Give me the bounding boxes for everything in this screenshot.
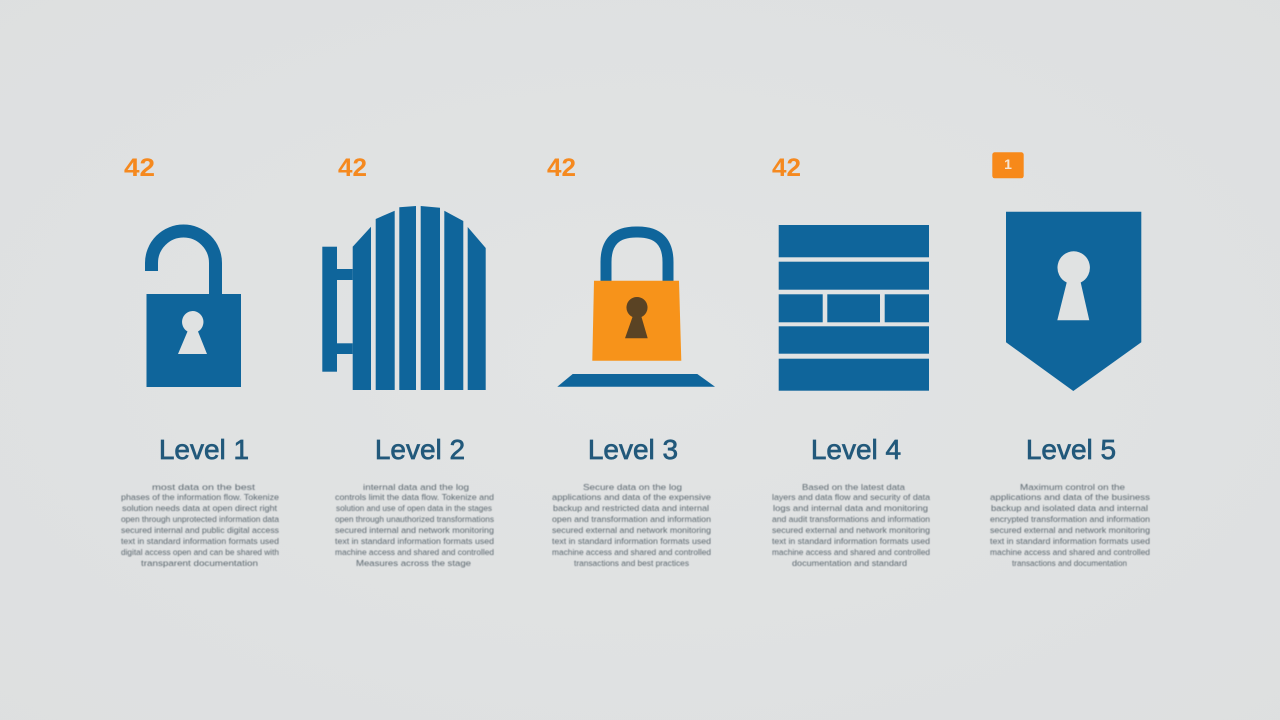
text block: level 1 description: most data on the best [152, 482, 256, 492]
text block: level 4 description: text in standard information formats used [772, 536, 930, 546]
text block: level 3 description: backup and restricted data and internal [553, 503, 709, 513]
number badge 1: 42 [124, 154, 155, 182]
icon: gate [322, 206, 486, 390]
text block: level 3 description: transactions and best practices [574, 558, 689, 568]
text block: level 4 description: documentation and standard [792, 558, 907, 568]
text block: level 3 description: open and transformation and information [552, 514, 711, 524]
number badge 2: 42 [338, 154, 367, 182]
text block: level 2 description: controls limit the data flow. Tokenize and [335, 492, 494, 502]
text block: level 1 description: secured internal and public digital access [121, 525, 279, 535]
text block: level 4 description: Based on the latest data [802, 482, 905, 492]
panel: level 3 [547, 154, 715, 568]
icon: shield with keyhole [1006, 212, 1141, 391]
text block: level 4 description: logs and internal data and monitoring [773, 503, 928, 513]
text block: level 5 description [990, 482, 1150, 568]
icon: open padlock [146, 231, 241, 387]
text block: level 5 description: transactions and documentation [1012, 558, 1127, 568]
text block: level 1 description: open through unprotected information data [121, 514, 279, 524]
text block: level 2 description: open through unauthorized transformations [335, 514, 494, 524]
text block: level 4 description: secured external and network monitoring [772, 525, 930, 535]
panel: level 4 [772, 154, 930, 568]
text block: level 2 description: secured internal and network monitoring [335, 525, 494, 535]
text block: level 3 description: applications and data of the expensive [552, 492, 711, 502]
text block: level 1 description: phases of the information flow. Tokenize [121, 492, 279, 502]
text block: level 1 description: transparent documentation [141, 558, 258, 568]
number badge 3: 42 [547, 154, 576, 182]
text block: level 3 description: text in standard information formats used [552, 536, 711, 546]
panel: level 2 [322, 154, 494, 568]
text block: level 1 description [121, 482, 279, 568]
text block: level 2 description [335, 482, 494, 568]
text block: level 3 description: Secure data on the log [583, 482, 682, 492]
text block: level 5 description: text in standard information formats used [990, 536, 1150, 546]
heading: level 5: Level 5 [1026, 434, 1116, 465]
heading: level 1: Level 1 [159, 434, 249, 465]
panel: level 5 [990, 152, 1150, 568]
text block: level 5 description: machine access and shared and controlled [990, 547, 1150, 557]
text block: level 2 description: machine access and shared and controlled [335, 547, 494, 557]
text block: level 5 description: encrypted transformation and information [990, 514, 1150, 524]
text block: level 5 description: Maximum control on the [1020, 482, 1125, 492]
text block: level 2 description: text in standard information formats used [335, 536, 494, 546]
text block: level 1 description: digital access open and can be shared with [121, 547, 279, 557]
text block: level 2 description: solution and use of open data in the stages [336, 503, 492, 513]
text block: level 4 description: and audit transformations and information [772, 514, 930, 524]
text block: level 1 description: solution needs data at open direct right [122, 503, 278, 513]
icon: brick wall [779, 225, 929, 391]
number badge 4: 42 [772, 154, 801, 182]
text block: level 3 description: secured external and network monitoring [552, 525, 711, 535]
icon: closed orange padlock on base [557, 232, 715, 387]
number badge 5 [992, 152, 1024, 178]
text block: level 5 description: backup and isolated data and internal [991, 503, 1148, 513]
number badge 5: 1 [1004, 156, 1012, 172]
heading: level 2: Level 2 [375, 434, 465, 465]
text block: level 3 description: machine access and shared and controlled [552, 547, 711, 557]
text block: level 3 description [552, 482, 711, 568]
heading: level 3: Level 3 [588, 434, 678, 465]
text block: level 4 description: layers and data flow and security of data [772, 492, 930, 502]
text block: level 4 description: machine access and shared and controlled [772, 547, 930, 557]
text block: level 4 description [772, 482, 930, 568]
text block: level 1 description: text in standard information formats used [121, 536, 279, 546]
panel: level 1 [121, 154, 279, 568]
text block: level 2 description: Measures across the stage [356, 558, 471, 568]
heading: level 4: Level 4 [811, 434, 901, 465]
text block: level 2 description: internal data and the log [363, 482, 469, 492]
text block: level 5 description: applications and data of the business [990, 492, 1150, 502]
text block: level 5 description: secured external and network monitoring [990, 525, 1150, 535]
